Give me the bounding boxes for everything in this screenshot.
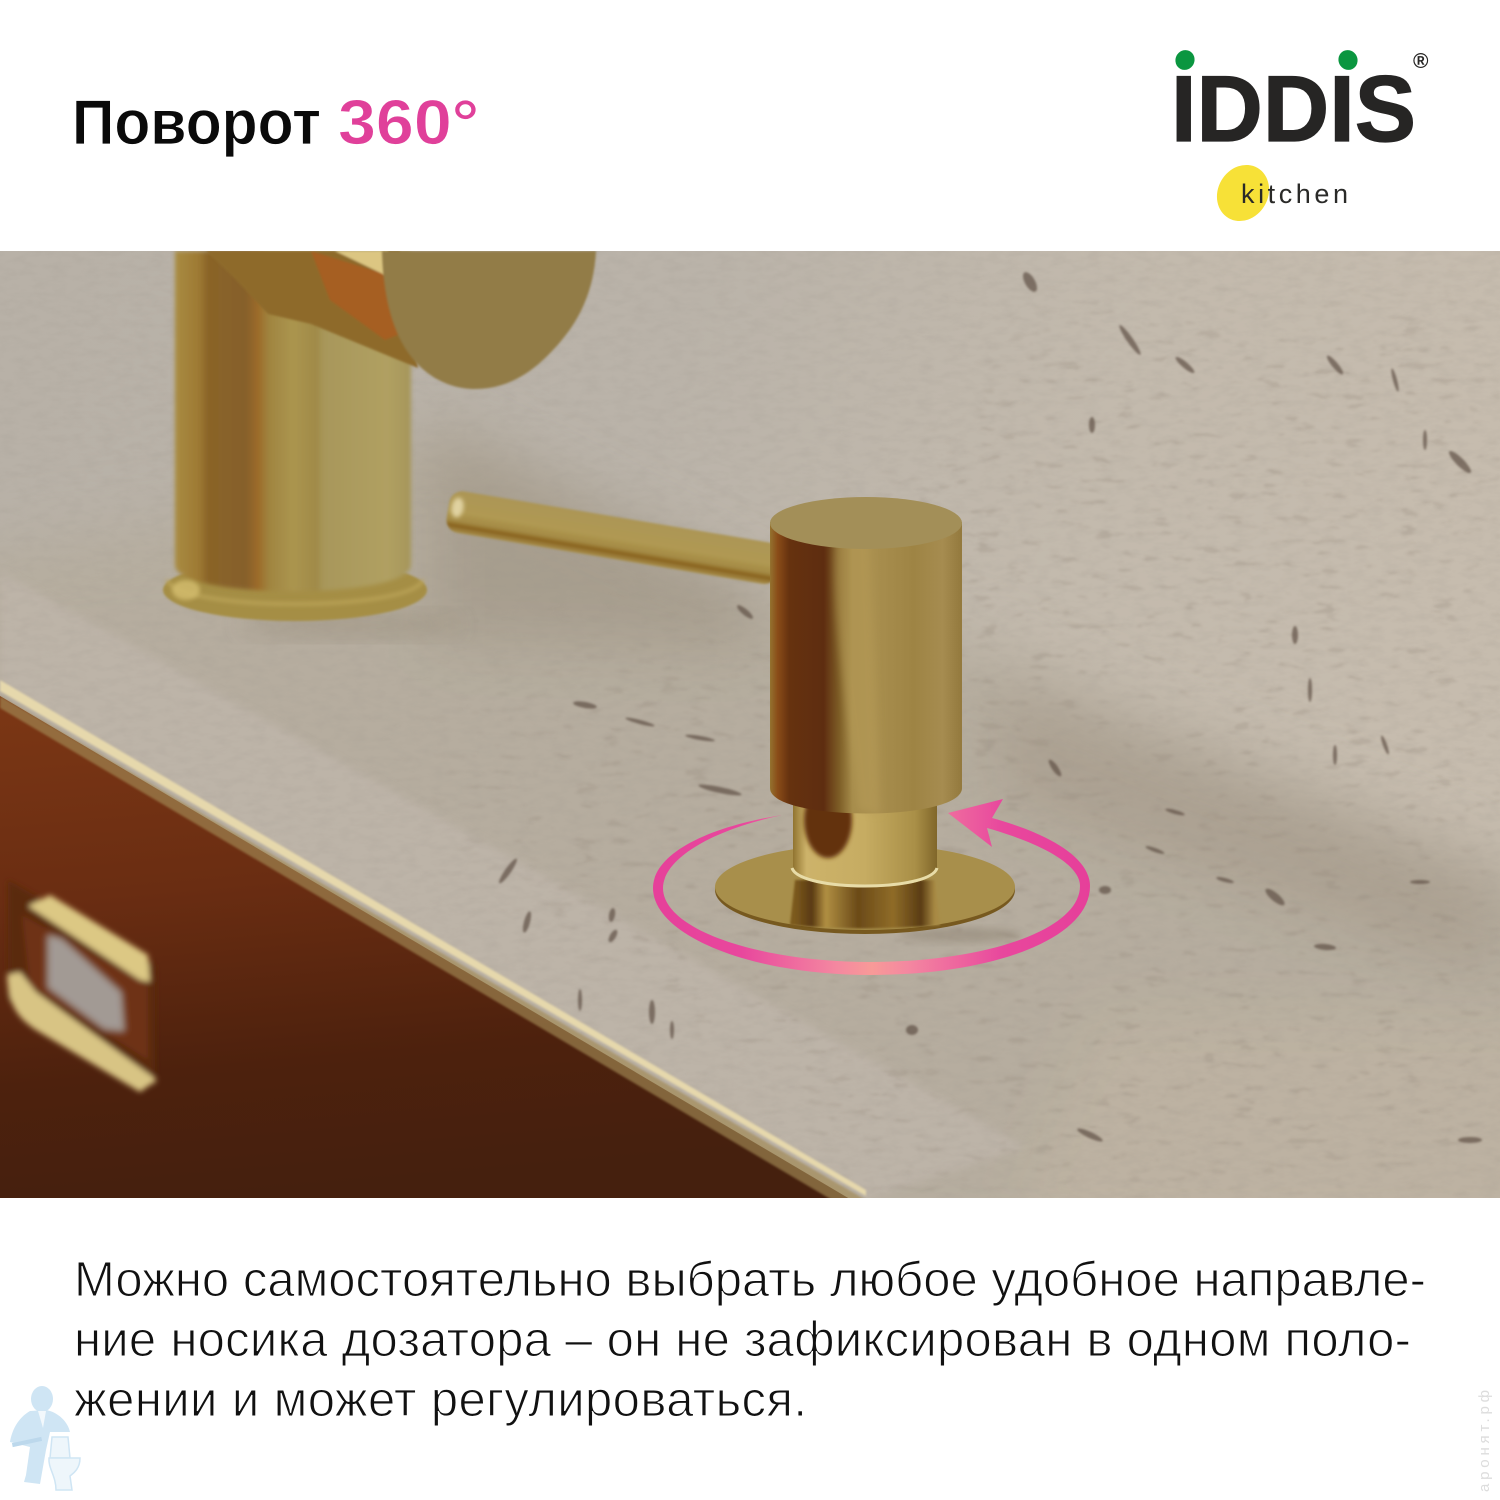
description line 1: Можно самостоятельно выбрать любое удобное направле- [74, 1253, 1426, 1307]
nameplate lettering [47, 934, 125, 1032]
neck reflection [804, 782, 852, 858]
photo: brass soap dispenser on travertine countertop [0, 251, 1500, 1260]
front stone band [0, 572, 1025, 1200]
dispenser flange edge [715, 846, 1015, 934]
arm back shade [206, 251, 418, 368]
description line 2: ние носика дозатора – он не зафиксирован в одном поло- [74, 1313, 1411, 1367]
nameplate bottom bar [7, 972, 157, 1092]
plumber head [31, 1386, 53, 1412]
toilet tank [50, 1437, 70, 1458]
plumber shirt front [38, 1411, 46, 1428]
title [72, 88, 479, 158]
countertop surface [0, 420, 1500, 1260]
lever tip highlight [450, 497, 465, 518]
logo subtitle: kitchen [1241, 179, 1348, 209]
faucet base lip [167, 580, 423, 604]
dispenser neck [793, 805, 937, 887]
nameplate top bar [28, 895, 150, 982]
dispenser shadow [900, 928, 1020, 942]
dispenser flange [715, 844, 1015, 930]
arm orange reflection [311, 251, 400, 340]
faucet handle disc [382, 251, 596, 389]
nameplate frame [8, 880, 155, 1085]
rotation arrow [653, 799, 1090, 975]
nameplate inner [22, 915, 148, 1060]
neck highlight ring [792, 868, 937, 886]
dispenser cylinder body [770, 522, 962, 814]
dispenser highlight [834, 540, 880, 815]
flange reflection [790, 880, 940, 928]
sink interior [0, 696, 860, 1205]
wall [0, 251, 1500, 906]
arm bright highlight [335, 251, 388, 275]
dispenser lever [445, 489, 782, 586]
sink inner shade at rim [0, 696, 866, 1200]
faucet base ring [163, 559, 427, 621]
sink nameplate [7, 880, 157, 1092]
faucet base highlight [172, 580, 200, 600]
plumber body [10, 1410, 70, 1484]
dispenser [445, 489, 1020, 942]
logo dot: left green [1172, 47, 1198, 73]
logo wordmark: IDDIS [1171, 56, 1416, 161]
faucet [163, 251, 596, 637]
watermark: plumber with toilet [10, 1386, 80, 1490]
faucet arm [206, 251, 418, 368]
watermark: vertical site name: аронят.рф [1476, 1390, 1493, 1492]
dispenser top cap [770, 497, 962, 549]
faucet column [175, 251, 411, 591]
faucet base shadow [240, 613, 460, 637]
stone texture [0, 251, 1500, 1198]
description text [74, 1253, 1426, 1427]
title accent: 360° [338, 88, 479, 158]
travertine pits [497, 270, 1482, 1144]
plumber wrench [12, 1437, 42, 1447]
brass sink rim [0, 680, 866, 1196]
logo yellow blob [1207, 155, 1279, 231]
lever shaft [445, 489, 782, 586]
toilet bowl [49, 1458, 80, 1490]
description line 3: жении и может регулироваться. [74, 1373, 807, 1427]
logo: iddis kitchen [1171, 47, 1429, 231]
logo dot: right green [1335, 47, 1361, 73]
registered mark: ® [1413, 50, 1429, 73]
title word: Поворот [72, 88, 321, 158]
stone pits texture [533, 318, 1483, 1171]
